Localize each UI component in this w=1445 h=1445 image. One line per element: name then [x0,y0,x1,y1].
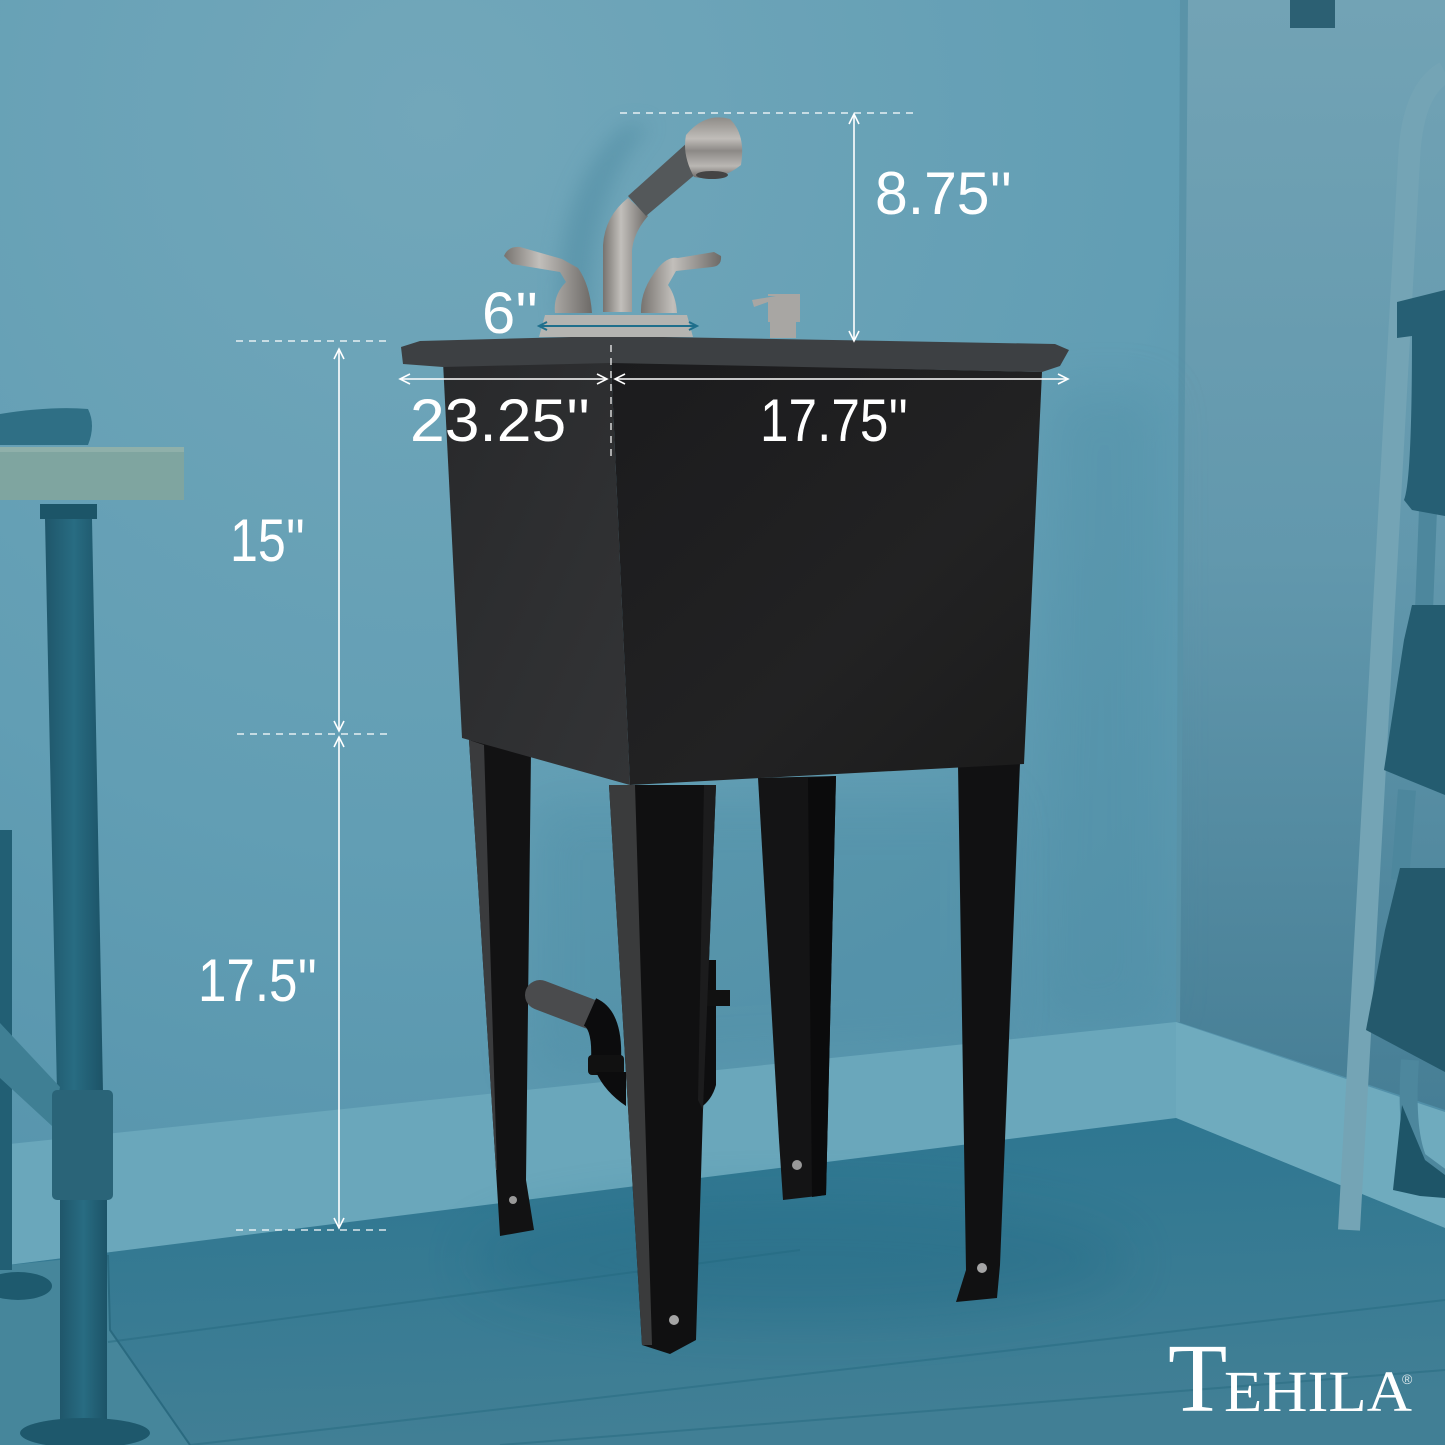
front rail [1349,72,1445,1230]
logo: T [1168,1325,1227,1432]
logo: EHILA [1224,1359,1412,1424]
tub side panel [443,362,630,785]
dimension lines [236,113,1068,1230]
floor [0,1118,1445,1445]
towel [0,408,92,445]
step 2 [1384,605,1445,795]
label: tub height: 15'' [230,507,305,574]
label: width: 17.75'' [760,387,908,454]
label: faucet height: 8.75'' [875,160,1012,227]
wall shadows [530,125,1160,1080]
label: faucet spread: 6'' [482,281,538,346]
utility sink [401,336,1069,1354]
side table with pipe legs [0,408,184,1445]
front leg [609,785,716,1354]
foot bracket [1393,1105,1445,1198]
back rail [1400,510,1445,1180]
soap dispenser [752,294,800,338]
label: depth: 23.25'' [410,387,590,454]
spray head [685,117,742,178]
deck plate [539,315,693,337]
faucet [504,117,800,338]
back legs [469,740,1020,1302]
back pipe [0,830,52,1300]
tub front panel [611,362,1042,785]
rim [401,336,1069,372]
left handle [504,247,592,313]
table top [0,447,184,500]
label: leg height: 17.5'' [198,947,317,1014]
step 1 [1397,290,1445,516]
drain pipe [540,960,730,1108]
front pipe [0,504,150,1445]
logo [1168,1325,1413,1432]
logo: ® [1402,1371,1413,1387]
baseboard [0,1022,1445,1266]
leg bolts [509,1160,987,1325]
step ladder [1290,0,1445,1230]
step 3 [1366,868,1445,1072]
right handle [641,252,721,313]
spout [603,198,648,312]
